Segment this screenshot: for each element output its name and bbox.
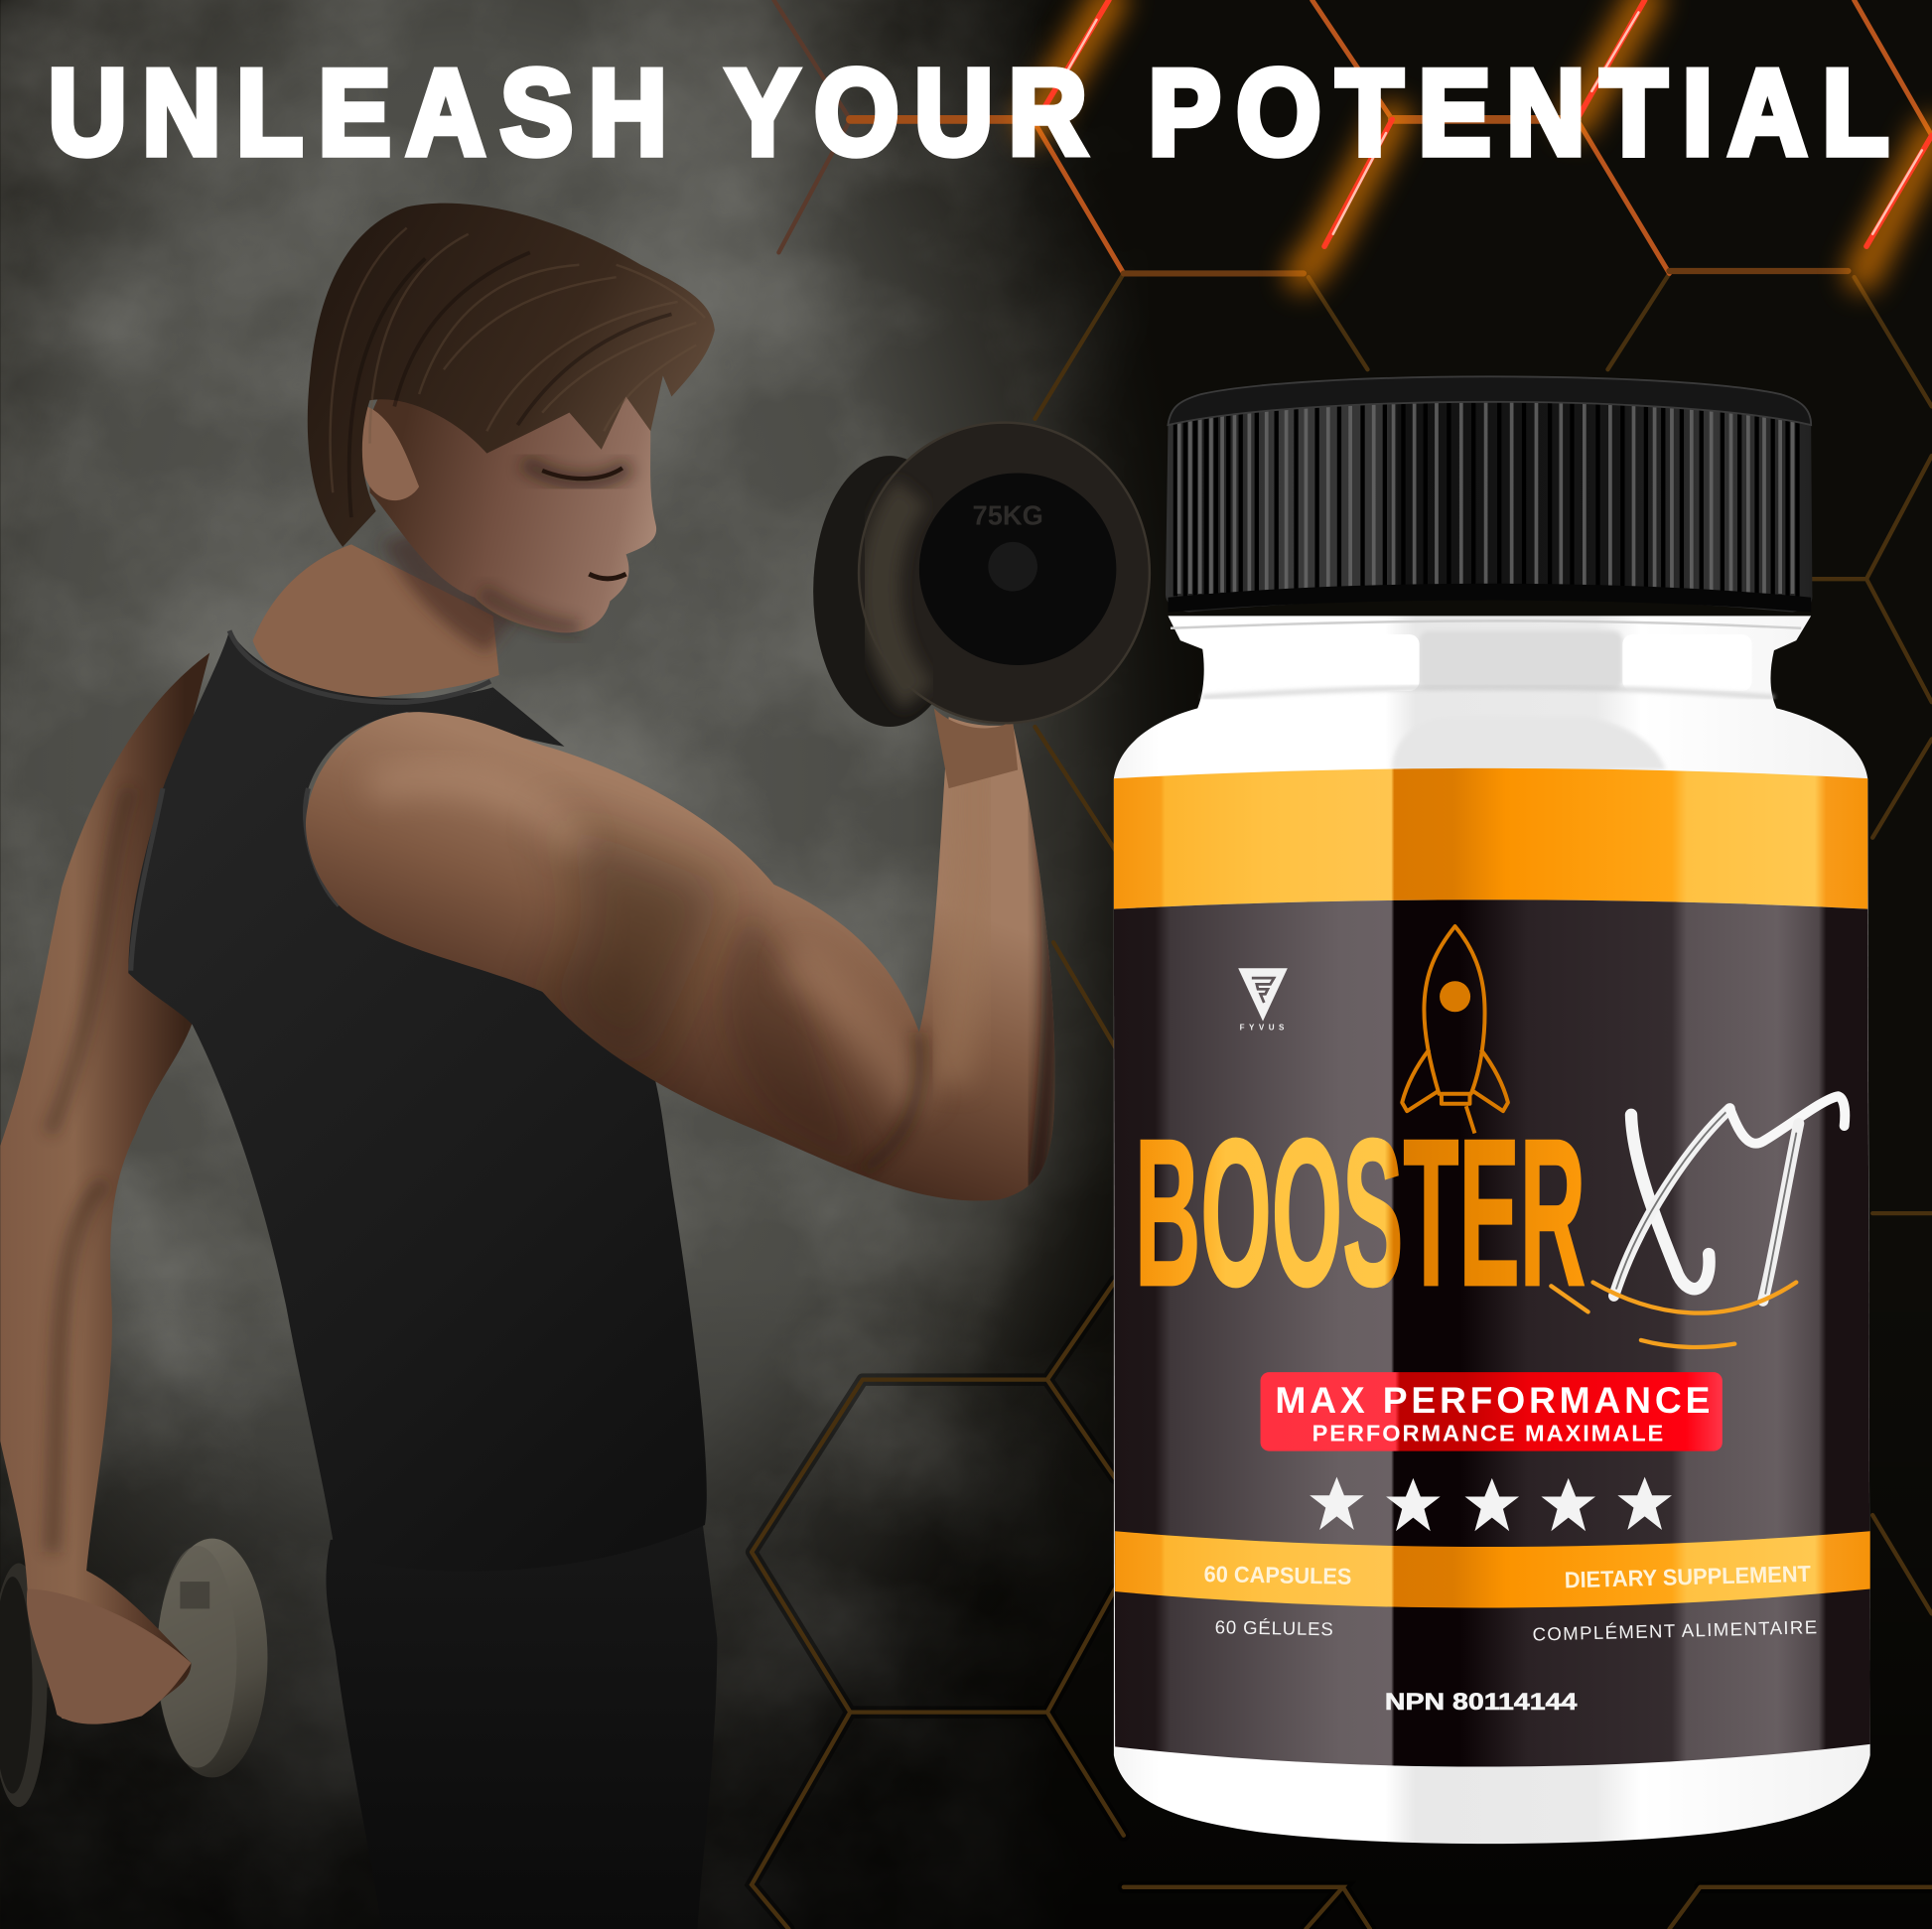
dark label	[1114, 899, 1870, 1767]
top orange band	[1114, 768, 1867, 909]
tank top	[128, 630, 707, 1572]
badge: max performance: MAX PERFORMANCE	[1275, 1379, 1710, 1421]
hand on upper dumbbell	[934, 708, 1018, 788]
right arm	[306, 712, 1054, 1200]
face shadows	[481, 462, 628, 628]
upper dumbbell	[813, 423, 1150, 727]
tank top seam	[131, 630, 490, 971]
label text: NPN: NPN 80114144	[1385, 1689, 1578, 1716]
background: hexagon neon grid	[752, 0, 1932, 1929]
bottle body	[1114, 616, 1870, 1844]
bottle cap	[1166, 376, 1813, 613]
lower dumbbell	[0, 1539, 267, 1807]
upper dumbbell: 75KG	[973, 500, 1043, 531]
lower hand	[27, 1589, 192, 1724]
background: smoke and dark gradient	[0, 0, 1143, 1929]
orange swooshes	[1551, 1283, 1796, 1347]
lower orange band	[1115, 1531, 1870, 1607]
badge: max performance	[1261, 1372, 1723, 1451]
head and face	[369, 315, 656, 632]
product name: XT script	[1614, 1096, 1845, 1301]
left arm	[0, 653, 209, 1722]
neck	[253, 544, 499, 697]
label text: complement alimentaire: COMPLÉMENT ALIMENTAIRE	[1532, 1616, 1817, 1645]
label text: capsules: 60 CAPSULES	[1203, 1561, 1352, 1589]
label text: gelules: 60 GÉLULES	[1215, 1616, 1333, 1639]
product bottle	[1114, 376, 1870, 1844]
title: UNLEASH YOUR POTENTIAL	[49, 45, 1888, 180]
neck highlights	[1171, 620, 1801, 769]
five stars	[1310, 1477, 1672, 1531]
shorts	[326, 1521, 717, 1929]
icon: rocket	[1402, 926, 1508, 1133]
hair	[308, 204, 715, 547]
neck shadow	[382, 530, 517, 653]
arm muscle shading	[369, 752, 1051, 1195]
brand logo	[1238, 968, 1289, 1032]
figure: athlete lifting dumbbells	[0, 204, 1150, 1929]
ear	[356, 406, 419, 500]
label text: dietary supplement: DIETARY SUPPLEMENT	[1564, 1561, 1811, 1592]
badge: max performance: PERFORMANCE MAXIMALE	[1312, 1421, 1663, 1447]
brand logo: FYVUS	[1240, 1023, 1289, 1032]
left arm muscle shading	[50, 788, 130, 1552]
